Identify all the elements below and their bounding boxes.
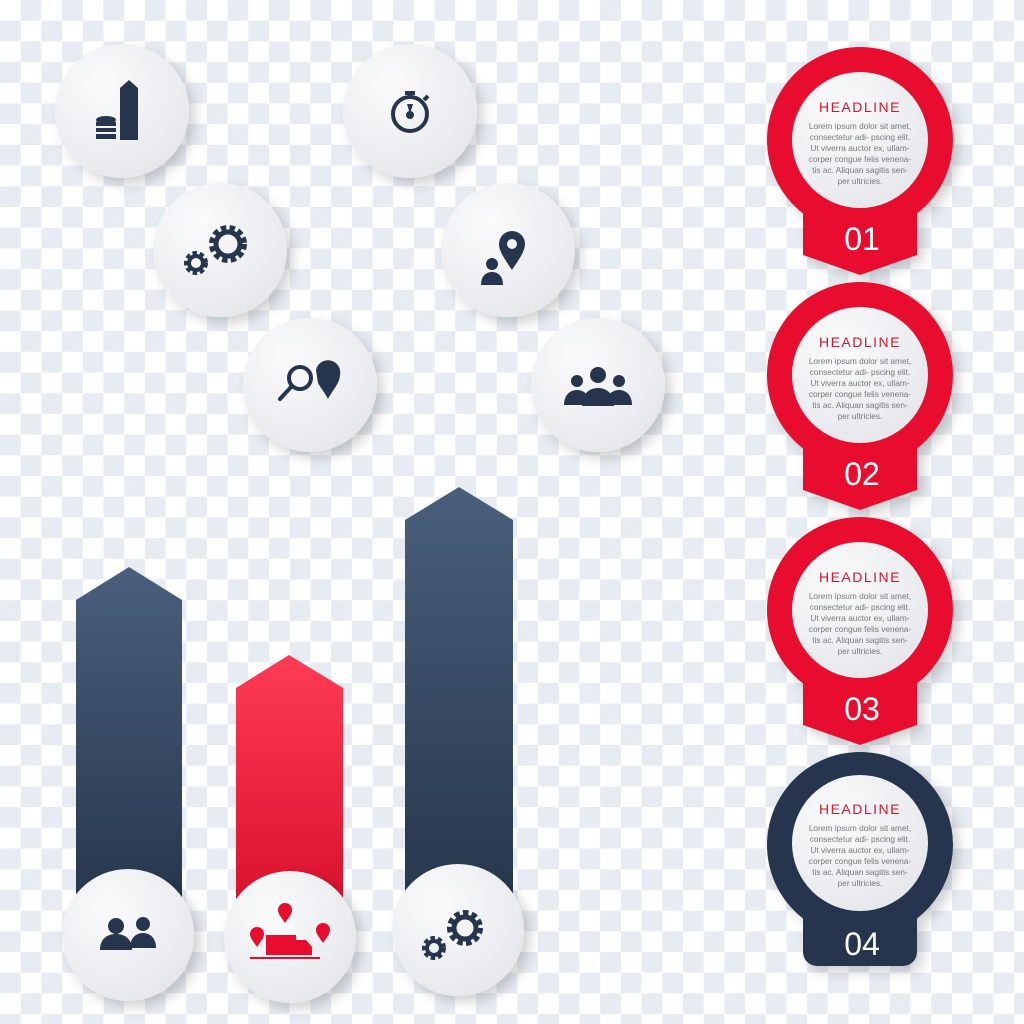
icon circle: coins and bar [55,44,189,178]
bar 1 navy arrow [76,567,182,910]
marker 01: consectetur adi- pscing elit. [810,132,910,142]
marker 02 [767,282,953,510]
icon circle: stopwatch [343,44,477,178]
marker 02: per ultricies. [838,411,882,421]
marker 04: per ultricies. [838,878,882,888]
marker 03 [767,517,953,745]
marker 04: Lorem ipsum dolor sit amet, [809,823,911,833]
marker 03: HEADLINE [819,569,901,585]
marker 04: consectetur adi- pscing elit. [810,834,910,844]
marker 02: 02 [844,456,880,492]
marker 01: corper congue felis venena- [809,154,911,164]
marker 03: corper congue felis venena- [809,624,911,634]
marker 01: tis ac. Aliquan sagitis sen- [812,165,908,175]
marker 03: Lorem ipsum dolor sit amet, [809,591,911,601]
marker 02: tis ac. Aliquan sagitis sen- [812,400,908,410]
marker 02: consectetur adi- pscing elit. [810,367,910,377]
icon circle: team [531,318,665,452]
marker 01: 01 [844,221,880,257]
marker 01 [767,47,953,275]
icon circle: gears [153,183,287,317]
icon circle: location person [441,183,575,317]
marker 01: Lorem ipsum dolor sit amet, [809,121,911,131]
marker 03: per ultricies. [838,646,882,656]
marker 04: 04 [844,926,880,962]
bottom circle: delivery route [224,871,356,1003]
marker 03: consectetur adi- pscing elit. [810,602,910,612]
marker 04: corper congue felis venena- [809,856,911,866]
bar 2 red arrow [236,655,343,910]
bar 3 navy arrow [405,487,513,905]
marker 03: tis ac. Aliquan sagitis sen- [812,635,908,645]
marker 01: per ultricies. [838,176,882,186]
marker 01: HEADLINE [819,99,901,115]
bottom circle: gears [392,864,524,996]
marker 03: 03 [844,691,880,727]
marker 02: Lorem ipsum dolor sit amet, [809,356,911,366]
marker 03: Ut viverra auctor ex, ullam- [810,613,910,623]
marker 04: HEADLINE [819,801,901,817]
marker 04: tis ac. Aliquan sagitis sen- [812,867,908,877]
marker 04: Ut viverra auctor ex, ullam- [810,845,910,855]
marker 02: HEADLINE [819,334,901,350]
marker 02: corper congue felis venena- [809,389,911,399]
marker 04 [767,752,953,966]
marker 01: Ut viverra auctor ex, ullam- [810,143,910,153]
bottom circle: users [62,869,194,1001]
marker 02: Ut viverra auctor ex, ullam- [810,378,910,388]
icon circle: search pin [243,318,377,452]
